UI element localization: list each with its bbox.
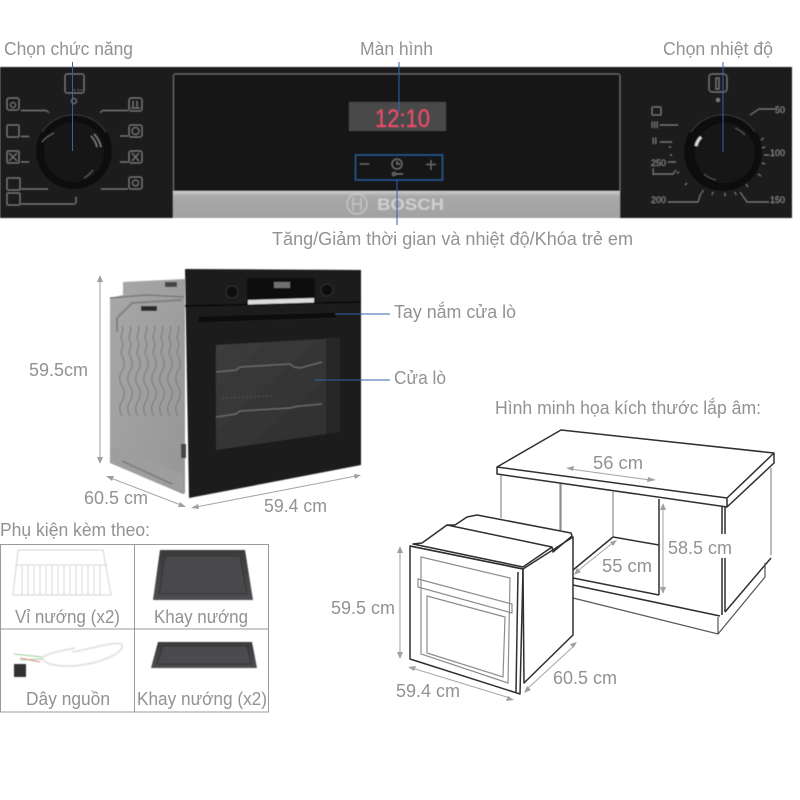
heading: built-in illustration: Hình minh họa kích thước lắp âm:	[495, 397, 761, 418]
caption: tray x2: Khay nướng (x2)	[137, 689, 267, 709]
dimension arrows: illustration	[397, 466, 666, 701]
display	[349, 102, 446, 133]
built-in oven line drawing	[410, 515, 573, 694]
temperature scale numbers: 200	[651, 195, 666, 205]
label: Chọn nhiệt độ: Chọn nhiệt độ	[663, 39, 773, 59]
caption: cable: Dây nguồn	[26, 689, 110, 709]
door handle	[198, 312, 337, 323]
temperature scale numbers: 250	[651, 158, 666, 168]
caption: rack: Vỉ nướng (x2)	[15, 607, 120, 627]
label: Màn hình: Màn hình	[360, 39, 433, 59]
label: height: 59.5cm	[29, 360, 88, 380]
left function icons	[7, 74, 142, 205]
mini control panel	[226, 278, 333, 304]
right temperature icons and scale	[652, 74, 775, 202]
dimension arrows: product photo	[97, 275, 361, 509]
oven window	[216, 338, 340, 450]
panel: oven control panel	[0, 67, 792, 218]
right temperature knob	[684, 113, 762, 191]
temperature scale numbers	[651, 105, 785, 205]
callout lines: handle and door	[315, 314, 390, 380]
label: 56 cm: 56 cm	[593, 453, 643, 473]
oven product photo	[110, 269, 361, 498]
shallow tray	[151, 642, 257, 668]
cabinet line drawing	[497, 430, 774, 634]
wire rack	[13, 550, 111, 595]
temperature scale numbers: 100	[770, 148, 785, 158]
label: door handle: Tay nắm cửa lò	[394, 301, 516, 322]
callout lines	[72, 62, 723, 225]
oven front	[185, 269, 361, 498]
label: Chọn chức năng: Chọn chức năng	[4, 39, 133, 59]
temperature scale numbers: II	[652, 136, 657, 146]
steel bar with BOSCH logo	[173, 191, 620, 218]
display: 12:10	[375, 105, 430, 133]
label: width: 59.4 cm	[264, 496, 327, 516]
label: 59.5 cm: 59.5 cm	[331, 598, 395, 618]
temperature scale numbers: 50	[775, 105, 785, 115]
temperature scale numbers: I	[652, 167, 655, 177]
left selector knob	[36, 113, 112, 189]
caption: tray: Khay nướng	[154, 607, 248, 627]
label: 55 cm: 55 cm	[602, 556, 652, 576]
temperature scale numbers: 150	[770, 195, 785, 205]
steel bar with BOSCH logo: BOSCH	[377, 195, 444, 214]
label: 59.4 cm: 59.4 cm	[396, 681, 460, 701]
accessories table	[0, 544, 268, 712]
large tray	[153, 550, 253, 600]
label: oven door: Cửa lò	[394, 368, 446, 388]
label: 60.5 cm: 60.5 cm	[553, 668, 617, 688]
touch controls	[356, 155, 442, 180]
label: depth: 60.5 cm	[84, 488, 148, 508]
central window	[174, 74, 620, 191]
label: 58.5 cm: 58.5 cm	[668, 538, 732, 558]
heading: accessories: Phụ kiện kèm theo:	[0, 520, 150, 540]
oven side panel	[110, 279, 186, 494]
power cable	[14, 643, 122, 677]
temperature scale numbers: III	[651, 120, 659, 130]
label: touch controls: Tăng/Giảm thời gian và nhiệt độ/Khóa trẻ em	[272, 229, 633, 249]
